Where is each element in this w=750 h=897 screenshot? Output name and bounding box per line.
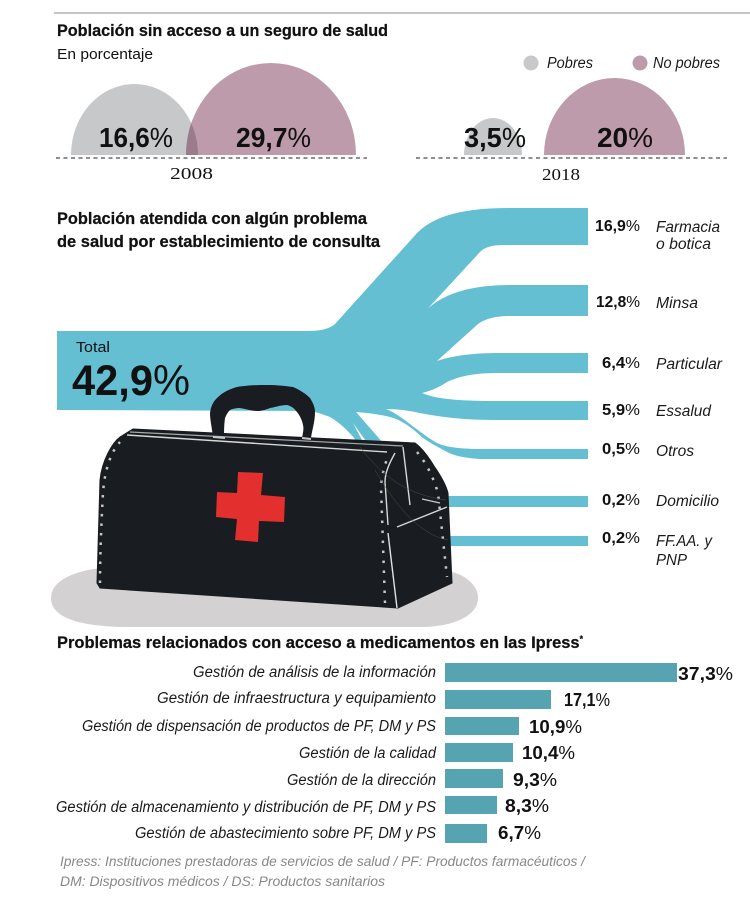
values and labels: establecimientos [595,218,723,569]
subheading: en porcentaje: En porcentaje [57,46,153,63]
values and labels: establecimientos: Particular [656,356,723,373]
bar row 1: 37,3% [678,664,733,684]
chart: semicírculos 2008: 2008 [170,164,213,183]
legend: pobres y no pobres [524,55,720,72]
bar row 1: Gestión de análisis de la información [193,664,436,681]
chart: semicírculos 2018: 2018 [542,165,580,184]
legend: pobres y no pobres: Pobres [547,55,593,72]
chart: semicírculos 2008: 16,6% [99,122,173,153]
bar row 3: 10,9% [529,717,582,737]
heading: población atendida: Población atendida con algún problema [57,209,368,228]
bar row 2 [157,690,610,710]
bar row 7 [135,823,541,843]
total callout: Total [76,339,110,356]
chart: semicírculos 2018 [416,78,727,184]
illustration: ground shadow [51,568,478,627]
values and labels: establecimientos: Domicilio [656,493,719,510]
bar row 5: Gestión de la dirección [287,772,436,789]
heading: población atendida: de salud por establecimiento de consulta [57,232,381,251]
values and labels: establecimientos: o botica [656,236,711,253]
heading: población sin seguro: Población sin acceso a un seguro de salud [57,21,388,40]
values and labels: establecimientos: 0,2% [602,492,640,509]
bar chart: problemas de acceso [56,663,733,843]
values and labels: establecimientos: PNP [656,552,688,569]
chart: semicírculos 2008: 29,7% [236,122,311,153]
chart: flujo sankey por establecimiento [57,208,588,546]
values and labels: establecimientos: 0,2% [602,530,640,547]
chart: semicírculos 2018: 3,5% [464,122,526,153]
values and labels: establecimientos: FF.AA. y [656,533,713,550]
footnote [60,853,587,889]
values and labels: establecimientos: Essalud [656,403,712,420]
footnote: Ipress: Instituciones prestadoras de servicios de salud / PF: Productos farmacéuticos / [60,853,587,869]
chart: semicírculos 2008 [56,63,367,183]
bar row 2: 17,1% [564,690,610,710]
footnote: DM: Dispositivos médicos / DS: Productos sanitarios [60,873,385,889]
bar row 4: 10,4% [522,743,575,763]
bar row 4 [299,743,575,763]
illustration: medical bag [97,385,452,608]
values and labels: establecimientos: Minsa [656,295,698,312]
bar row 6: 8,3% [505,796,549,816]
bar row 7: Gestión de abastecimiento sobre PF, DM y PS [135,825,437,842]
values and labels: establecimientos: 16,9% [595,218,640,235]
bar row 5: 9,3% [513,770,557,790]
values and labels: establecimientos: 6,4% [602,355,640,372]
legend: pobres y no pobres: No pobres [653,55,720,72]
chart: semicírculos 2018: 20% [597,122,653,153]
bar row 1 [193,663,733,684]
bar row 7: 6,7% [498,823,541,843]
values and labels: establecimientos: Otros [656,443,694,460]
icon: red cross [216,472,285,542]
values and labels: establecimientos: 12,8% [596,294,640,311]
heading: problemas medicamentos: Problemas relacionados con acceso a medicamentos en las Ipress [57,633,597,652]
values and labels: establecimientos: 5,9% [602,402,640,419]
values and labels: establecimientos: Farmacia [656,219,720,236]
bar row 3: Gestión de dispensación de productos de PF, DM y PS [82,718,437,735]
total callout: 42,9% [72,357,190,405]
bar row 3 [82,717,582,737]
bar row 2: Gestión de infraestructura y equipamiento [157,690,436,707]
bar row 6: Gestión de almacenamiento y distribución de PF, DM y PS [56,799,437,816]
bar row 6 [56,796,549,816]
heading: problemas medicamentos: * [580,634,583,644]
values and labels: establecimientos: 0,5% [602,441,640,458]
bar row 5 [287,769,557,790]
bar row 4: Gestión de la calidad [299,745,437,762]
heading: población atendida [57,209,381,251]
